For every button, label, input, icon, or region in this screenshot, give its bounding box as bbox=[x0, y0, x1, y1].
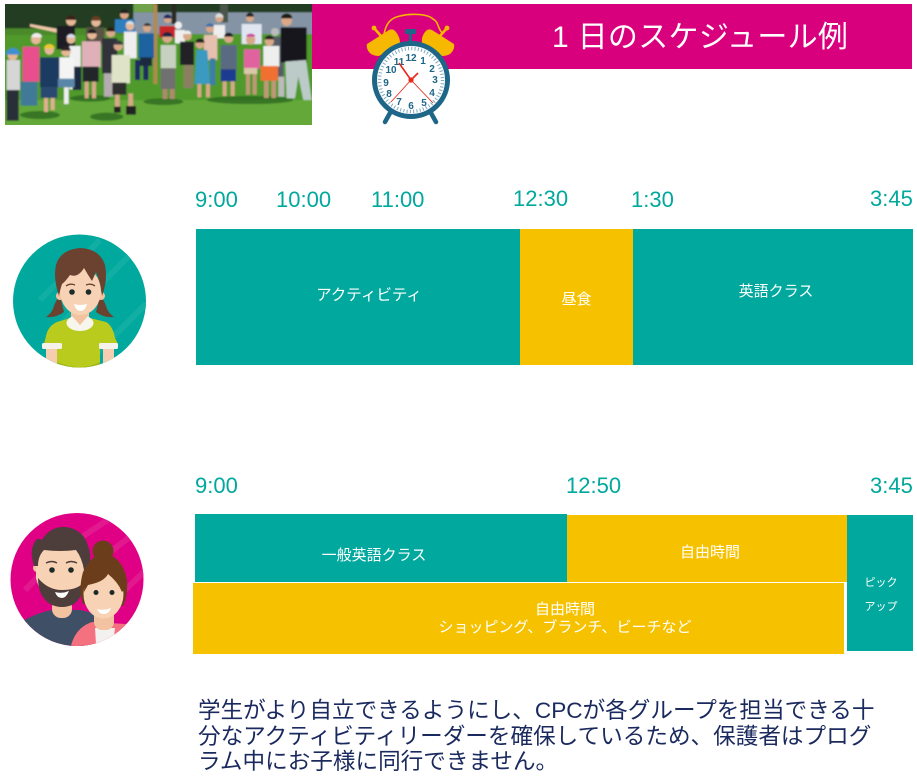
block: English class: 英語クラス bbox=[739, 283, 813, 300]
icon: alarm clock: 9 bbox=[383, 78, 389, 89]
block: free time, shopping and brunch bbox=[193, 583, 844, 654]
time labels: schedule 1: 10:00 bbox=[276, 187, 331, 212]
time labels: schedule 2: 9:00 bbox=[195, 473, 238, 498]
icon: alarm clock: 12 bbox=[405, 53, 417, 64]
block: pick-up: アップ bbox=[864, 601, 898, 613]
icon: alarm clock: 1 bbox=[420, 56, 426, 67]
icon: alarm clock: 8 bbox=[386, 89, 392, 100]
block: free time, shopping and brunch: 自由時間 bbox=[535, 601, 595, 618]
block: activity: アクティビティ bbox=[316, 287, 422, 304]
time labels: schedule 1: 9:00 bbox=[195, 187, 238, 212]
time labels: schedule 1: 1:30 bbox=[631, 187, 674, 212]
block: general English class: 一般英語クラス bbox=[322, 547, 426, 564]
banner bbox=[312, 4, 912, 69]
front row bbox=[6, 13, 312, 121]
block: pick-up bbox=[847, 515, 913, 651]
icon: alarm clock: 3 bbox=[432, 75, 438, 86]
block: lunch: 昼食 bbox=[561, 291, 592, 308]
time labels: schedule 2: 12:50 bbox=[566, 473, 621, 498]
time labels: schedule 2: 3:45 bbox=[870, 473, 913, 498]
icon: alarm clock: 2 bbox=[429, 64, 435, 75]
block: activity bbox=[196, 229, 520, 365]
note text: 分なアクティビティリーダーを確保しているため、保護者はプログ bbox=[198, 724, 871, 748]
block: free time, shopping and brunch: ショッピング、ブランチ、ビーチなど bbox=[438, 619, 692, 636]
block: free time: 自由時間 bbox=[680, 544, 740, 561]
time labels: schedule 1: 3:45 bbox=[870, 186, 913, 211]
title: 1 日のスケジュール例 bbox=[552, 21, 848, 54]
icon: alarm clock: 6 bbox=[408, 101, 414, 112]
block: general English class bbox=[195, 514, 567, 582]
block: free time bbox=[567, 515, 847, 582]
block: pick-up: ピック bbox=[864, 577, 898, 589]
time labels: schedule 1: 11:00 bbox=[371, 187, 424, 212]
icon: child avatar bbox=[13, 234, 146, 368]
icon: alarm clock: 4 bbox=[429, 88, 435, 99]
schedule 1 bar bbox=[196, 229, 913, 365]
note text bbox=[198, 698, 874, 774]
icon: parents avatar bbox=[10, 513, 144, 646]
icon: alarm clock: 7 bbox=[396, 97, 402, 108]
note text: ラム中にお子様に同行できません。 bbox=[198, 749, 558, 774]
block: English class bbox=[633, 229, 913, 365]
block: lunch bbox=[520, 229, 633, 365]
note text: 学生がより自立できるようにし、CPCが各グループを担当できる十 bbox=[198, 698, 874, 723]
back row bbox=[57, 9, 284, 97]
icon: alarm clock: 5 bbox=[421, 98, 427, 109]
time labels: schedule 1: 12:30 bbox=[513, 186, 568, 211]
icon: alarm clock: 11 bbox=[394, 57, 405, 68]
time labels: schedule 2 bbox=[195, 473, 913, 498]
photo: group of children on the grass bbox=[5, 4, 312, 125]
icon: alarm clock bbox=[366, 14, 454, 124]
icon: alarm clock: 10 bbox=[385, 65, 397, 76]
time labels: schedule 1 bbox=[195, 186, 913, 212]
